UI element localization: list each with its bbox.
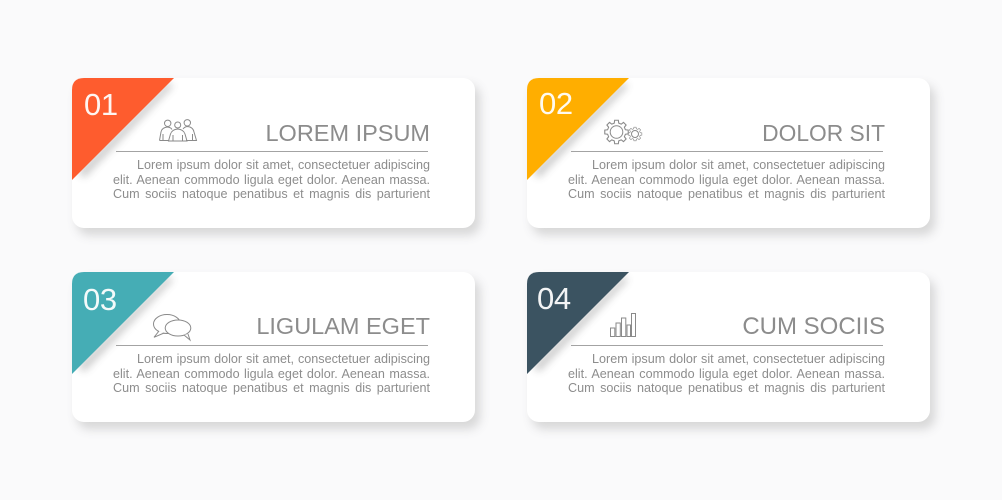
heading: CUM SOCIIS	[742, 313, 885, 340]
body text: Cum sociis natoque penatibus et magnis dis parturient	[113, 381, 430, 395]
body text	[568, 352, 885, 395]
body text	[113, 352, 430, 395]
body text: elit. Aenean commodo ligula eget dolor. Aenean massa.	[113, 172, 430, 186]
heading: LOREM IPSUM	[265, 120, 430, 146]
panel: 04 Cum sociis	[527, 272, 938, 432]
body text: Lorem ipsum dolor sit amet, consectetuer adipiscing	[592, 158, 885, 172]
body text	[568, 158, 885, 201]
amber corner tab	[527, 78, 642, 180]
orange corner tab	[72, 78, 198, 180]
number 02: 02	[539, 86, 573, 121]
body text: elit. Aenean commodo ligula eget dolor. Aenean massa.	[568, 172, 885, 186]
body text: Cum sociis natoque penatibus et magnis dis parturient	[113, 187, 430, 201]
number 04: 04	[537, 281, 571, 316]
body text: Cum sociis natoque penatibus et magnis dis parturient	[568, 381, 885, 395]
heading: LIGULAM EGET	[256, 313, 430, 339]
body text: Lorem ipsum dolor sit amet, consectetuer adipiscing	[137, 352, 430, 366]
body text: Cum sociis natoque penatibus et magnis dis parturient	[568, 187, 885, 201]
panel: 01 Lorem ipsum	[72, 78, 484, 238]
body text: elit. Aenean commodo ligula eget dolor. Aenean massa.	[568, 366, 885, 380]
body text: Lorem ipsum dolor sit amet, consectetuer adipiscing	[592, 352, 885, 366]
panel: 02 Dolor sit	[527, 78, 938, 238]
body text: Lorem ipsum dolor sit amet, consectetuer adipiscing	[137, 158, 430, 172]
navy corner tab	[527, 272, 636, 374]
number 01: 01	[84, 87, 118, 122]
body text	[113, 158, 430, 201]
number 03: 03	[83, 282, 117, 317]
body text: elit. Aenean commodo ligula eget dolor. Aenean massa.	[113, 366, 430, 380]
panel: 03 Ligulam eget	[72, 272, 484, 432]
teal corner tab	[72, 272, 192, 374]
heading: DOLOR SIT	[762, 120, 885, 146]
